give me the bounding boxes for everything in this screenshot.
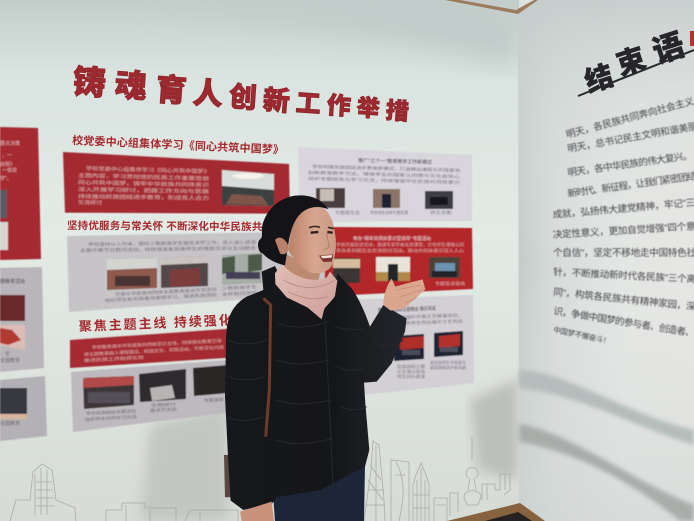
panel: left gray fragment one xyxy=(0,267,44,372)
main title: 新 xyxy=(262,85,291,117)
panel: upper right gray: 推广"三个一"教育教学工作新模式 xyxy=(358,157,432,166)
main title: 创 xyxy=(228,81,258,114)
photo: stage two xyxy=(434,331,463,357)
photo: lecturer xyxy=(376,257,410,281)
person: lower hand xyxy=(240,502,274,521)
right wall: closing text: 同"，构筑各民族共有精神家园，深 xyxy=(553,286,694,313)
main title xyxy=(72,63,410,125)
panel: upper right gray xyxy=(298,147,472,222)
panel: lower right gray: 各民族师生共同参与 xyxy=(430,359,466,365)
right wall: closing text: 个自信"，坚定不移地走中国特色社 xyxy=(553,247,694,259)
wall shadow by corner xyxy=(470,378,518,480)
floor dark inset xyxy=(485,512,532,521)
right wall: closing words heading: 结 xyxy=(581,60,617,98)
panel: upper right gray: 专题报告会 xyxy=(335,209,360,215)
person: brows xyxy=(309,226,334,229)
panel: theme gray xyxy=(71,359,240,432)
person: hair xyxy=(258,195,328,265)
panel: group study red: 同心共筑中国梦，铸牢中华民族共同体意识 xyxy=(78,179,209,189)
right wall: closing text: 成就，弘扬伟大建党精神，牢记"三 xyxy=(552,197,694,221)
person: raised hand xyxy=(383,279,425,311)
panel: upper right gray: 创新教育教学方式，增强学生的国家认同感与文化自信心 xyxy=(308,169,461,180)
person: face xyxy=(288,205,336,273)
panel: group study red: 主题内容，学习贯彻党的民族工作重要思想 xyxy=(78,172,209,182)
heading: service and care: 坚持优服务与常关怀 不断深化中华民族共同体意识 xyxy=(67,219,306,234)
person: mouth xyxy=(319,254,333,262)
panel: group study red: 交流研讨 xyxy=(78,199,102,206)
panel: left red fragment: 一等奖 xyxy=(2,167,17,174)
main title: 作 xyxy=(326,92,352,121)
photo: speaker xyxy=(373,189,400,208)
panel: service gray: 组织师生赴实践基地参观学习，增进民族团结 xyxy=(105,291,217,304)
panel: lower right gray: 展现团结进步新风貌 xyxy=(430,364,466,370)
panel: middle right red: 举办系列报告及交流研讨活动，推动共同体意识深入人心 xyxy=(336,247,465,254)
panel: service gray xyxy=(67,231,335,312)
person: jeans xyxy=(273,465,365,521)
panel: middle right red: 举办"铸牢共同体意识宣讲月"专题活动 xyxy=(353,235,431,242)
right wall: closing text: 针，不断推动新时代各民族"三个离 xyxy=(553,266,694,285)
panel: service gray: 少数民族学生 xyxy=(222,283,257,292)
photo: outdoor group xyxy=(222,253,262,285)
photo: meeting room xyxy=(222,170,274,206)
panel: left gray fragment one: 全国教育 xyxy=(0,357,20,364)
panel: group study red: 持续推动民族团结进步教育，形成育人合力 xyxy=(78,193,209,202)
photo: seminar xyxy=(139,369,186,402)
panel: theme gray: 组织师生共同学习交流 xyxy=(85,413,138,423)
skyline illustration xyxy=(10,437,510,521)
ceiling beam xyxy=(445,0,538,14)
panel: lower right gray: 师生同台表演 xyxy=(397,373,425,379)
heading underline xyxy=(578,50,694,96)
panel: lower right gray: 民族团结主题 xyxy=(397,363,425,369)
panel: left red fragment: 学"。 xyxy=(0,175,12,182)
panel: theme gray: 座谈交流会 xyxy=(150,406,178,414)
ceiling shadow xyxy=(150,0,518,70)
left red photos xyxy=(0,190,7,218)
panel: theme gray: 专题报告 xyxy=(204,396,224,404)
right wall: closing text: 新时代、新征程，让我们紧密团结 xyxy=(567,170,694,200)
panel: middle right red: 学校开展宣讲活动，邀请专家学者走进课堂，引导师生增强认同 xyxy=(336,241,464,248)
left gray photo xyxy=(0,295,25,321)
panel: lower right gray xyxy=(340,295,474,395)
photo: dark hall xyxy=(193,364,240,396)
panel: left red fragment: 向明》 xyxy=(0,161,15,168)
photo: group room xyxy=(161,256,208,288)
panel: theme red band: 学校聚焦铸牢中华民族共同体意识主线，持续强化教育引导 xyxy=(92,337,223,351)
right wall: closing text: 决定性意义，更加自觉增强"四个意 xyxy=(552,220,694,241)
main title: 育 xyxy=(155,72,188,109)
panel: left gray fragment two xyxy=(0,376,47,441)
person: jacket quilting xyxy=(227,318,403,490)
panel: theme gray: 举办民族团结主题活动 xyxy=(86,407,136,417)
panel: service gray: 学校坚持以人为本，做好少数民族学生服务关怀工作，深入谈心谈话 xyxy=(88,239,257,248)
panel: service gray: 开展中华民族共同体主题教育座谈交流活动 xyxy=(115,286,217,298)
panel: service gray: 关怀慰问活动 xyxy=(222,289,257,298)
panel: middle right red: 专题宣讲现场 xyxy=(435,281,465,286)
left wall xyxy=(0,0,519,521)
panel: lower right gray: 学校组织开展文艺展演活动， xyxy=(395,312,463,321)
panel: left red fragment: 、一 xyxy=(2,153,12,159)
photo: auditorium xyxy=(429,257,460,278)
panel: group study red: 学校党委中心组集体学习《同心共筑中国梦》 xyxy=(86,165,210,175)
main title: 举 xyxy=(356,94,381,122)
photo: hall xyxy=(107,258,157,290)
panel: theme gray: 主题研讨 xyxy=(151,401,176,409)
person: woman in black jacket xyxy=(224,195,425,521)
panel: upper right gray: 学校领导讲授专题党课 xyxy=(370,209,408,215)
right wall: closing words heading: 语 xyxy=(648,27,689,70)
heading: group study: 校党委中心组集体学习《同心共筑中国梦》 xyxy=(72,133,284,157)
panel: left red fragment xyxy=(0,127,41,260)
person: jacket xyxy=(225,266,407,510)
heading: theme focus: 聚焦主题主线 持续强化 xyxy=(78,313,232,334)
panel: left red fragment: 要点决策 xyxy=(0,140,20,147)
main title: 铸 xyxy=(72,63,107,102)
person: ear xyxy=(275,238,289,254)
panel: group study red xyxy=(63,152,290,216)
panel: lower right gray: 文艺演出现场 xyxy=(397,368,425,374)
right wall: closing text: 明天，各中华民族的伟大复兴。 xyxy=(567,150,693,179)
right wall: closing text: 明天，各民族共同奔向社会主义 xyxy=(565,95,694,141)
right wall: closing text: 中国梦不懈奋斗！ xyxy=(553,324,611,346)
panel: left gray fragment one: 、全 xyxy=(0,350,10,357)
panel: lower right gray: 各民族师生同台展示才艺风采 xyxy=(395,318,464,327)
panel: left gray fragment one: 题教育活动 xyxy=(0,278,25,285)
person: teeth xyxy=(321,255,332,258)
panel: left gray fragment two: 全国教育 xyxy=(0,420,20,427)
panel: lower right gray: 举办民族团结主题晚会 展示风采 xyxy=(378,305,436,314)
photo: stage xyxy=(316,188,345,208)
person: scarf fold xyxy=(283,280,335,299)
person: finger lines xyxy=(397,285,423,303)
person: bag xyxy=(224,455,231,497)
person: eyes xyxy=(311,228,333,236)
photo: classroom xyxy=(333,258,360,283)
right wall tone xyxy=(518,0,694,521)
person: neck xyxy=(283,253,320,290)
right wall mountain wash xyxy=(519,370,694,521)
right wall: closing words heading xyxy=(578,27,694,98)
person: scarf xyxy=(275,266,337,319)
photo: group dark xyxy=(425,191,453,209)
person shadow on wall xyxy=(140,405,228,521)
floor skirting xyxy=(447,503,545,521)
panel: theme red band: 推进民族工作取得实效 xyxy=(84,354,145,364)
panel: upper right gray: 学校构建民族团结进步教育新模式，打造精品课程与实践基地 xyxy=(312,163,461,174)
right wall: closing words heading: 束 xyxy=(612,42,650,82)
panel: theme red band xyxy=(70,328,240,368)
main title: 魂 xyxy=(114,67,148,105)
photo: group banner xyxy=(83,376,134,409)
main title: 工 xyxy=(295,89,322,119)
person: nose xyxy=(323,233,329,250)
right wall: closing text xyxy=(552,95,694,346)
panel: service gray: 全面开展节日慰问活动，持续增进各民族师生的情感交流与互动融合 xyxy=(80,245,257,254)
main title: 人 xyxy=(192,77,224,112)
panel: theme red band: 将主题教育融入课程建设、校园文化、实践活动，不断深化内涵 xyxy=(84,344,224,358)
panel: group study red: 深入开展学习研讨，把握工作方向与思路 xyxy=(78,186,209,195)
panel: middle right red xyxy=(325,227,473,295)
panel: upper right gray: 师生合影 xyxy=(430,209,452,215)
photo: stage one xyxy=(394,334,424,361)
right wall xyxy=(518,0,694,521)
red marker xyxy=(690,31,694,46)
panel: upper right gray: 组织专题报告与学习交流，持续增强中华民族共同体意识 xyxy=(308,175,460,186)
person: bag strap xyxy=(263,298,271,437)
main title: 措 xyxy=(385,97,410,125)
right wall: closing text: 识，争做中国梦的参与者、创造者、 xyxy=(553,305,694,339)
